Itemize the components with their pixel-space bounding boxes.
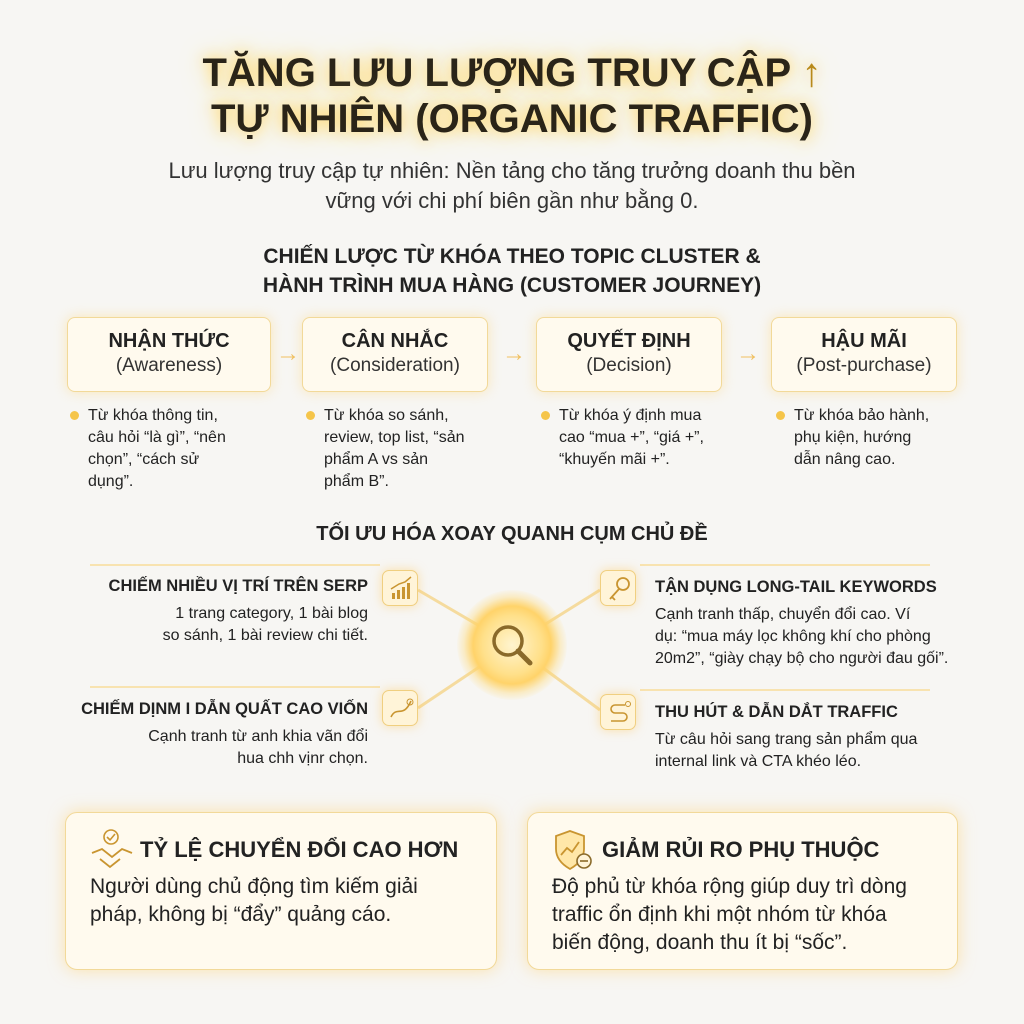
card: conversion: pháp, không bị “đẩy” quảng cáo.	[90, 903, 391, 926]
stage: decision: (Decision)	[586, 355, 672, 376]
item: serp: so sánh, 1 bài review chi tiết.	[163, 627, 368, 644]
card: risk: biến động, doanh thu ít bị “sốc”.	[552, 931, 847, 954]
item: traffic: internal link và CTA khéo léo.	[655, 753, 861, 770]
stage: awareness	[67, 317, 271, 392]
bullet: awareness: câu hỏi “là gì”, “nên	[88, 429, 226, 446]
item: left 2: Cạnh tranh từ anh khia vãn đổi	[148, 728, 368, 745]
icon: handshake	[92, 829, 132, 868]
heading: customer journey: HÀNH TRÌNH MUA HÀNG (CUSTOMER JOURNEY)	[263, 274, 761, 297]
item: serp	[109, 576, 368, 644]
icon: path	[600, 694, 636, 730]
subtitle: vững với chi phí biên gần như bằng 0.	[326, 188, 698, 213]
stage: decision: QUYẾT ĐỊNH	[567, 330, 691, 352]
bullet: awareness: dụng”.	[88, 473, 133, 490]
card: risk: GIẢM RỦI RO PHỤ THUỘC	[602, 837, 879, 862]
bullet: consideration: Từ khóa so sánh,	[324, 407, 449, 424]
bullet: consideration: review, top list, “sản	[324, 429, 464, 446]
bullet: post-purchase: dẫn nâng cao.	[794, 451, 895, 468]
item: left 2: hua chh vịnr chọn.	[237, 750, 368, 767]
title: TỰ NHIÊN (ORGANIC TRAFFIC)	[211, 97, 813, 141]
card: conversion: Người dùng chủ động tìm kiếm giải	[90, 875, 418, 898]
icon: key	[600, 570, 636, 606]
stage: post-purchase: (Post-purchase)	[796, 355, 932, 376]
arrow: →	[276, 340, 300, 367]
bullet: decision	[541, 405, 731, 471]
bullet: post-purchase: phụ kiện, hướng	[794, 429, 911, 446]
item: long-tail: dụ: “mua máy lọc không khí cho phòng	[655, 628, 931, 645]
arrow: →	[502, 340, 526, 367]
heading: customer journey: CHIẾN LƯỢC TỪ KHÓA THEO TOPIC CLUSTER &	[263, 245, 761, 268]
stage: awareness: (Awareness)	[116, 355, 222, 376]
bullet: decision: Từ khóa ý định mua	[559, 407, 701, 424]
bullet: consideration: phẩm B”.	[324, 473, 389, 490]
icon: shield	[555, 830, 592, 870]
item: left 2: CHIẾM DỊNM I DẪN QUẤT CAO VIỐN	[81, 700, 368, 718]
bullet: awareness: Từ khóa thông tin,	[88, 407, 218, 424]
subtitle	[168, 158, 856, 213]
icon: magnifier center	[457, 590, 567, 700]
heading: topic cluster: TỐI ƯU HÓA XOAY QUANH CỤM CHỦ ĐỀ	[316, 523, 708, 545]
item: long-tail	[655, 577, 948, 667]
stage: awareness: NHẬN THỨC	[108, 330, 230, 352]
item: serp: 1 trang category, 1 bài blog	[175, 605, 368, 622]
icon: route	[382, 690, 418, 726]
bullet: decision: cao “mua +”, “giá +”,	[559, 429, 704, 446]
item: long-tail: TẬN DỤNG LONG-TAIL KEYWORDS	[655, 578, 937, 596]
bullet: decision: “khuyến mãi +”.	[559, 451, 670, 468]
item: traffic: Từ câu hỏi sang trang sản phẩm qua	[655, 731, 917, 748]
card: conversion: TỶ LỆ CHUYỂN ĐỔI CAO HƠN	[140, 837, 458, 862]
bullet: consideration	[306, 405, 496, 493]
stage: consideration	[302, 317, 488, 392]
stage: post-purchase: HẬU MÃI	[821, 330, 907, 352]
item: serp: CHIẾM NHIỀU VỊ TRÍ TRÊN SERP	[109, 577, 368, 595]
item: long-tail: Cạnh tranh thấp, chuyển đổi cao. Ví	[655, 606, 910, 623]
bullet: awareness: chọn”, “cách sử	[88, 451, 199, 468]
stage: post-purchase	[771, 317, 957, 392]
bullet: post-purchase	[776, 405, 966, 471]
stage: consideration: CÂN NHẮC	[342, 330, 448, 352]
card: risk: Độ phủ từ khóa rộng giúp duy trì dòng	[552, 875, 907, 898]
stage: consideration: (Consideration)	[330, 355, 460, 376]
icon: chart	[382, 570, 418, 606]
bullet: awareness	[70, 405, 260, 493]
item: left 2	[81, 699, 368, 767]
item: traffic: THU HÚT & DẪN DẮT TRAFFIC	[655, 703, 898, 721]
subtitle: Lưu lượng truy cập tự nhiên: Nền tảng cho tăng trưởng doanh thu bền	[168, 158, 856, 183]
heading: customer journey	[263, 244, 761, 297]
card: risk: traffic ổn định khi một nhóm từ khóa	[552, 903, 887, 926]
card: conversion	[65, 812, 497, 970]
stage: decision	[536, 317, 722, 392]
arrow: →	[736, 340, 760, 367]
item: traffic	[655, 702, 918, 770]
item: long-tail: 20m2”, “giày chạy bộ cho người đau gối”.	[655, 650, 948, 667]
bullet: consideration: phẩm A vs sản	[324, 451, 428, 468]
title	[194, 40, 824, 150]
title: TĂNG LƯU LƯỢNG TRUY CẬP ↑	[202, 51, 822, 95]
card: risk	[527, 812, 958, 970]
bullet: post-purchase: Từ khóa bảo hành,	[794, 407, 929, 424]
